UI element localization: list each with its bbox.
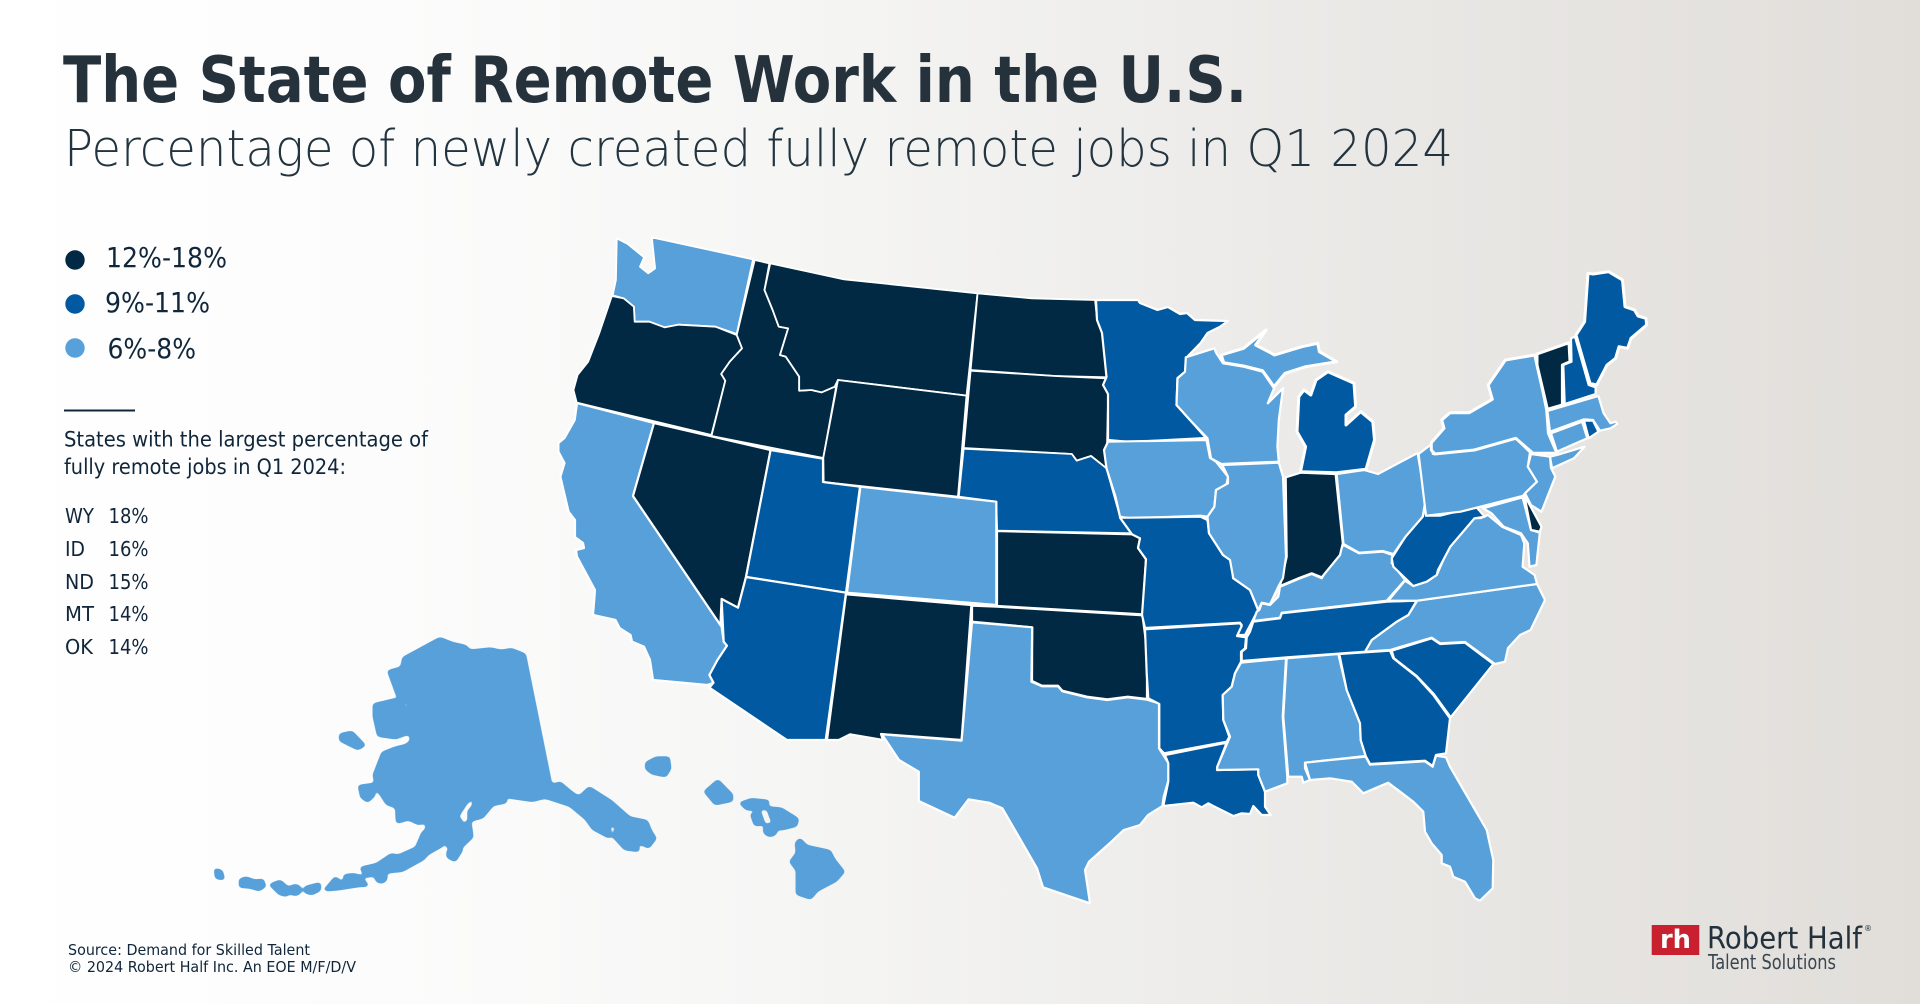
state: NJ: [1525, 454, 1555, 512]
top states table: 18%: [108, 504, 148, 528]
island: Maui: [768, 808, 797, 829]
top states description: fully remote jobs in Q1 2024:: [64, 455, 346, 479]
state: CA: [558, 403, 727, 685]
state: NM: [827, 594, 971, 740]
state: MA: [1547, 396, 1617, 432]
state: OH: [1337, 453, 1426, 554]
state: OR: [573, 296, 742, 435]
logo: Robert Half Talent Solutions: [1652, 922, 1872, 974]
top states table: OK: [65, 635, 94, 659]
logo: Robert Half Talent Solutions: rh: [1660, 925, 1691, 955]
top states table: WY: [65, 504, 95, 528]
state: RI: [1584, 421, 1598, 438]
top states table: ND: [65, 570, 94, 594]
state: IN: [1280, 473, 1343, 586]
source note: [68, 941, 357, 976]
state: SC: [1392, 638, 1493, 717]
legend item: 9%-11%: [65, 286, 210, 319]
Alaska islands: [216, 733, 471, 895]
state: VA: [1388, 515, 1537, 601]
source note: © 2024 Robert Half Inc. An EOE M/F/D/V: [68, 958, 357, 976]
island: Molokai: [742, 800, 767, 809]
island: Kahoolawe: [765, 825, 776, 835]
state: OK: [972, 606, 1147, 699]
state: MI upper peninsula: [1221, 330, 1337, 387]
state: ME: [1576, 272, 1647, 385]
top states table: 15%: [108, 570, 148, 594]
state: MD: [1483, 497, 1540, 567]
state: LA: [1163, 743, 1271, 816]
top states table: ID: [65, 537, 85, 561]
island: Big Island: [791, 840, 843, 898]
top states table: 14%: [108, 635, 148, 659]
map: northwest and plains states: [573, 237, 1132, 533]
state: DE: [1524, 495, 1542, 532]
top states description: [64, 428, 429, 479]
state: NY: [1431, 355, 1557, 454]
state: AZ: [709, 577, 846, 740]
logo: Robert Half Talent Solutions: ®: [1864, 924, 1872, 933]
legend item: 9%-11%: 9%-11%: [105, 286, 210, 319]
title: The State of Remote Work in the U.S.: [63, 44, 1247, 118]
state: KS: [997, 531, 1146, 614]
island: Oahu: [706, 781, 731, 803]
state: GA: [1339, 651, 1450, 766]
state: WY: [823, 380, 967, 497]
top states table: MT: [65, 602, 95, 626]
state: VT: [1537, 343, 1570, 409]
state: CO: [847, 487, 996, 605]
island: Lanai: [752, 812, 763, 824]
state: WI: [1176, 348, 1283, 464]
source note: Source: Demand for Skilled Talent: [68, 941, 310, 959]
state: PA: [1419, 438, 1537, 516]
legend item: 12%-18%: 12%-18%: [106, 241, 227, 274]
state: KY: [1253, 545, 1405, 621]
state: NV: [633, 423, 771, 625]
state: MS: [1217, 658, 1287, 792]
top states table: 16%: [108, 537, 148, 561]
state: FL: [1305, 756, 1493, 901]
state: WA: [613, 237, 753, 334]
top states table: 14%: [108, 602, 148, 626]
state: NC: [1365, 584, 1545, 664]
state: TN: [1242, 601, 1417, 661]
state: IL: [1208, 463, 1286, 610]
state: NE: [959, 449, 1132, 533]
legend item: 6%-8%: 6%-8%: [108, 332, 196, 365]
legend: [65, 241, 227, 365]
state: CT: [1551, 422, 1587, 452]
subtitle: Percentage of newly created fully remote jobs in Q1 2024: [64, 120, 1453, 179]
state: AL: [1283, 654, 1366, 783]
logo: Robert Half Talent Solutions: Talent Solutions: [1707, 950, 1836, 974]
state: NH: [1563, 337, 1596, 404]
map: Hawaii: [647, 758, 843, 898]
top states description: States with the largest percentage of: [64, 428, 429, 452]
state: ID: [711, 260, 836, 458]
island: Kauai: [647, 758, 669, 775]
state: WV: [1392, 502, 1485, 586]
state: IA: [1104, 440, 1228, 518]
state: SD: [964, 371, 1108, 468]
state: TX: [882, 622, 1168, 903]
state: MT: [764, 263, 978, 396]
map: remaining contiguous states: [558, 272, 1647, 903]
map: Alaska: [216, 639, 655, 895]
state: UT: [746, 450, 860, 593]
state: ND: [971, 293, 1107, 377]
state: MI lower peninsula: [1297, 372, 1374, 473]
state: MO: [1120, 517, 1258, 635]
legend item: 6%-8%: [65, 332, 196, 365]
legend item: 12%-18%: [65, 241, 227, 274]
top states table: [65, 504, 148, 659]
Alaska mainland: [362, 639, 655, 876]
state: NY Long Island: [1550, 447, 1585, 468]
state: AR: [1145, 623, 1246, 753]
logo: Robert Half Talent Solutions: Robert Half: [1707, 922, 1863, 956]
state: MN: [1096, 300, 1228, 442]
